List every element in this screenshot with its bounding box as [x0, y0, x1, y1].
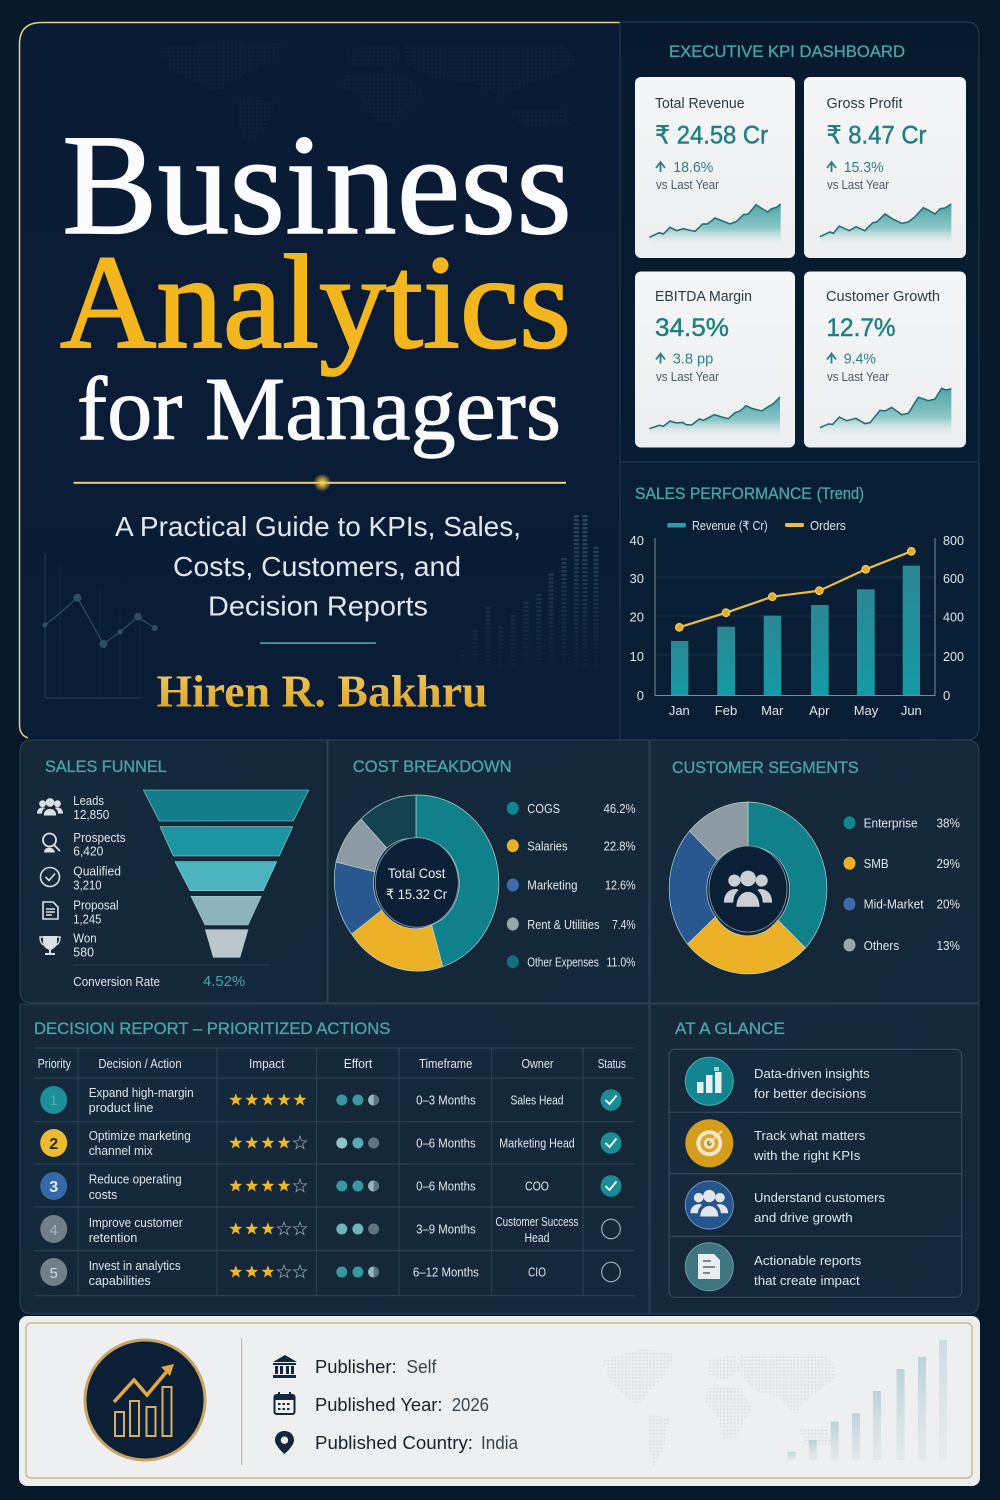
bar and line chart: 200 [943, 649, 964, 664]
background line chart [42, 553, 158, 698]
KPI card: customer growth: Customer Growth [826, 289, 940, 305]
donut center label: Total Cost [388, 865, 445, 881]
bar and line chart: Jan [669, 703, 690, 718]
item: understand customers [685, 1181, 885, 1229]
KPI card: total revenue [635, 77, 795, 258]
KPI card: total revenue: ₹ 24.58 Cr [655, 122, 768, 150]
donut center label: ₹ 15.32 Cr [386, 886, 447, 902]
bar and line chart: 400 [943, 610, 964, 624]
KPI card: gross profit: vs Last Year [827, 178, 889, 192]
KPI card: customer growth [804, 272, 966, 448]
funnel stages: Leads [73, 794, 104, 808]
table row 3: Reduce operating [89, 1172, 182, 1186]
footer bars [788, 1340, 947, 1460]
legend [667, 519, 846, 533]
icon: customers [724, 871, 772, 907]
heading: DECISION REPORT – PRIORITIZED ACTIONS [34, 1020, 390, 1038]
publisher row [273, 1355, 437, 1378]
table row 1 [40, 1086, 621, 1115]
table row 3: COO [525, 1180, 549, 1194]
table row 1: Sales Head [510, 1094, 564, 1108]
subtitle [115, 511, 521, 622]
legend: 29% [936, 857, 960, 871]
table row 5: Invest in analytics [89, 1259, 181, 1273]
heading: SALES PERFORMANCE [635, 485, 812, 503]
table row 1: 0–3 Months [416, 1094, 476, 1108]
published year row: 2026 [452, 1395, 489, 1415]
legend: COGS [527, 802, 560, 816]
publisher row: Publisher: [315, 1357, 397, 1377]
item: actionable reports: that create impact [754, 1274, 860, 1288]
item: actionable reports [685, 1243, 861, 1291]
bar and line chart [630, 533, 964, 718]
legend: 46.2% [604, 802, 636, 816]
conversion rate [73, 973, 245, 990]
KPI card: total revenue: vs Last Year [656, 178, 719, 192]
table header: Owner [521, 1057, 554, 1071]
KPI card: customer growth: 9.4% [844, 350, 876, 368]
icon: prospect search [43, 834, 60, 852]
funnel stages: 3,210 [73, 878, 102, 892]
item: track KPIs: Track what matters [754, 1129, 865, 1143]
KPI card: EBITDA margin: vs Last Year [656, 370, 719, 384]
legend: Others [864, 939, 899, 953]
table row 3: costs [89, 1188, 117, 1202]
icon: proposal document [43, 902, 58, 919]
table header: Priority [38, 1057, 72, 1071]
table row 4: Head [524, 1231, 550, 1245]
title [60, 106, 572, 459]
funnel stages: 6,420 [73, 844, 103, 858]
legend: 38% [936, 816, 960, 830]
KPI card: gross profit: ₹ 8.47 Cr [826, 122, 926, 150]
funnel stages: Won [73, 932, 97, 946]
funnel stages: 1,245 [73, 912, 101, 926]
KPI card: EBITDA margin: 34.5% [655, 314, 729, 342]
funnel stages: 12,850 [73, 808, 109, 822]
legend: Rent & Utilities [527, 918, 600, 932]
footer world map [602, 1349, 837, 1467]
table header: Decision / Action [98, 1057, 182, 1071]
heading: COST BREAKDOWN [353, 758, 512, 776]
bar and line chart: 20 [630, 610, 644, 624]
item: data-driven insights: for better decisions [754, 1087, 866, 1101]
funnel stages: Proposal [73, 898, 119, 912]
item: actionable reports: Actionable reports [754, 1254, 861, 1268]
table row 5: 5 [50, 1265, 58, 1282]
KPI card: customer growth: vs Last Year [827, 370, 889, 384]
donut chart [334, 795, 499, 971]
bar and line chart: 0 [943, 688, 950, 703]
table row 4: 4 [50, 1222, 58, 1239]
funnel stages: Qualified [73, 864, 121, 878]
publisher row: Self [406, 1357, 437, 1377]
icon: people [37, 798, 63, 815]
table row 3: 0–6 Months [416, 1180, 476, 1194]
bar and line chart: 0 [637, 688, 644, 703]
published year row: Published Year: [315, 1395, 442, 1415]
legend: 7.4% [612, 918, 636, 932]
legend: 12.6% [605, 878, 636, 892]
table row 2: Marketing Head [499, 1136, 575, 1150]
heading: AT A GLANCE [675, 1020, 785, 1038]
author: Hiren R. Bakhru [156, 666, 488, 717]
table row 5: CIO [528, 1266, 546, 1280]
legend: Other Expenses [527, 956, 599, 970]
bar and line chart: May [854, 703, 879, 718]
table row 5 [40, 1258, 620, 1288]
funnel stages: Prospects [73, 831, 126, 845]
legend [844, 816, 960, 953]
funnel [143, 790, 309, 957]
table row 3 [40, 1172, 621, 1202]
KPI card: gross profit: 15.3% [844, 159, 884, 176]
legend: Enterprise [864, 816, 918, 830]
legend: Orders [810, 519, 846, 533]
table row 4: Improve customer [89, 1216, 183, 1230]
panel: publication footer [19, 1316, 980, 1486]
subtitle: Decision Reports [208, 590, 428, 622]
heading: CUSTOMER SEGMENTS [672, 759, 859, 777]
table row 4: retention [89, 1231, 137, 1245]
table header: Status [598, 1057, 626, 1071]
table row 3: 3 [49, 1179, 58, 1196]
table row 1: product line [89, 1101, 153, 1115]
legend [507, 802, 636, 970]
bar and line chart: 40 [630, 533, 644, 548]
table row 2: Optimize marketing [89, 1129, 191, 1143]
KPI card: customer growth: 12.7% [826, 314, 896, 342]
table header: Impact [249, 1057, 285, 1071]
title: Business [62, 106, 572, 265]
bar and line chart: Mar [761, 703, 784, 718]
table row 4: 3–9 Months [416, 1222, 476, 1236]
panel: sales performance [620, 462, 979, 740]
table header: Effort [344, 1057, 373, 1071]
KPI card: EBITDA margin: EBITDA Margin [655, 289, 752, 305]
heading: EXECUTIVE KPI DASHBOARD [669, 43, 905, 61]
item: data-driven insights [685, 1057, 870, 1105]
conversion rate: Conversion Rate [73, 975, 160, 989]
funnel stages [73, 794, 126, 960]
legend: Mid-Market [864, 898, 924, 912]
table header [38, 1057, 626, 1071]
item: data-driven insights: Data-driven insights [754, 1067, 870, 1081]
item: track KPIs [685, 1119, 865, 1167]
donut chart [669, 802, 827, 974]
KPI card: EBITDA margin [635, 272, 795, 448]
legend: 11.0% [606, 956, 636, 970]
title: for Managers [77, 360, 561, 459]
bar and line chart: Apr [809, 703, 830, 718]
KPI card: gross profit [804, 77, 966, 258]
donut center label [386, 865, 447, 902]
icon: trophy [40, 936, 60, 955]
item: understand customers: Understand customers [754, 1191, 885, 1205]
heading: (Trend) [817, 485, 864, 503]
table header: Timeframe [419, 1057, 472, 1071]
conversion rate: 4.52% [203, 973, 245, 990]
table row 2: 0–6 Months [416, 1136, 476, 1150]
table row 4 [40, 1215, 620, 1245]
table row 4: Customer Success [496, 1215, 578, 1229]
table row 2: 2 [49, 1136, 58, 1153]
legend: Salaries [527, 840, 568, 854]
table row 5: capabilities [89, 1274, 151, 1288]
published country row: Published Country: [315, 1433, 473, 1453]
bar and line chart: 30 [630, 571, 644, 586]
panel: decision report [20, 1004, 649, 1314]
item: track KPIs: with the right KPIs [753, 1149, 860, 1163]
legend: Revenue (₹ Cr) [692, 519, 768, 533]
published year row [274, 1392, 489, 1415]
table row 2 [40, 1129, 621, 1158]
panel: sales funnel [20, 740, 327, 1003]
legend: 22.8% [604, 840, 636, 854]
title: Analytics [60, 228, 571, 376]
item: understand customers: and drive growth [754, 1211, 853, 1225]
heading: SALES FUNNEL [45, 758, 167, 776]
panel: book cover [20, 22, 620, 740]
panel: at a glance [650, 1004, 979, 1314]
table row 2: channel mix [89, 1144, 153, 1158]
bar and line chart: Feb [715, 703, 737, 718]
KPI card: EBITDA margin: 3.8 pp [673, 350, 713, 368]
subtitle: Costs, Customers, and [173, 551, 461, 582]
legend: 20% [936, 898, 960, 912]
published country row: India [481, 1433, 519, 1453]
bar and line chart: 600 [943, 571, 964, 586]
table row 5: 6–12 Months [413, 1266, 479, 1280]
background dotted world map [154, 40, 581, 145]
legend: SMB [864, 857, 889, 871]
KPI card: gross profit: Gross Profit [826, 96, 902, 112]
emblem: growth chart [85, 1340, 205, 1460]
legend: 13% [936, 939, 960, 953]
bar and line chart: Jun [901, 703, 922, 718]
bar and line chart: 10 [630, 649, 644, 664]
table row 1: Expand high-margin [89, 1086, 194, 1100]
panel: executive KPI dashboard [620, 22, 979, 462]
background dotted bars [462, 515, 596, 668]
panel: customer segments [650, 740, 979, 1003]
icon: check circle [40, 868, 60, 886]
legend: Marketing [527, 878, 578, 892]
subtitle: A Practical Guide to KPIs, Sales, [115, 511, 521, 542]
KPI card: total revenue: 18.6% [673, 159, 713, 176]
KPI card: total revenue: Total Revenue [655, 96, 744, 112]
funnel stages: 580 [73, 946, 94, 960]
published country row [275, 1431, 519, 1454]
table row 1: 1 [50, 1092, 58, 1108]
panel: cost breakdown [328, 740, 649, 1003]
teal divider [260, 642, 376, 644]
bar and line chart: 800 [943, 533, 964, 548]
gold divider with glow [74, 474, 566, 492]
